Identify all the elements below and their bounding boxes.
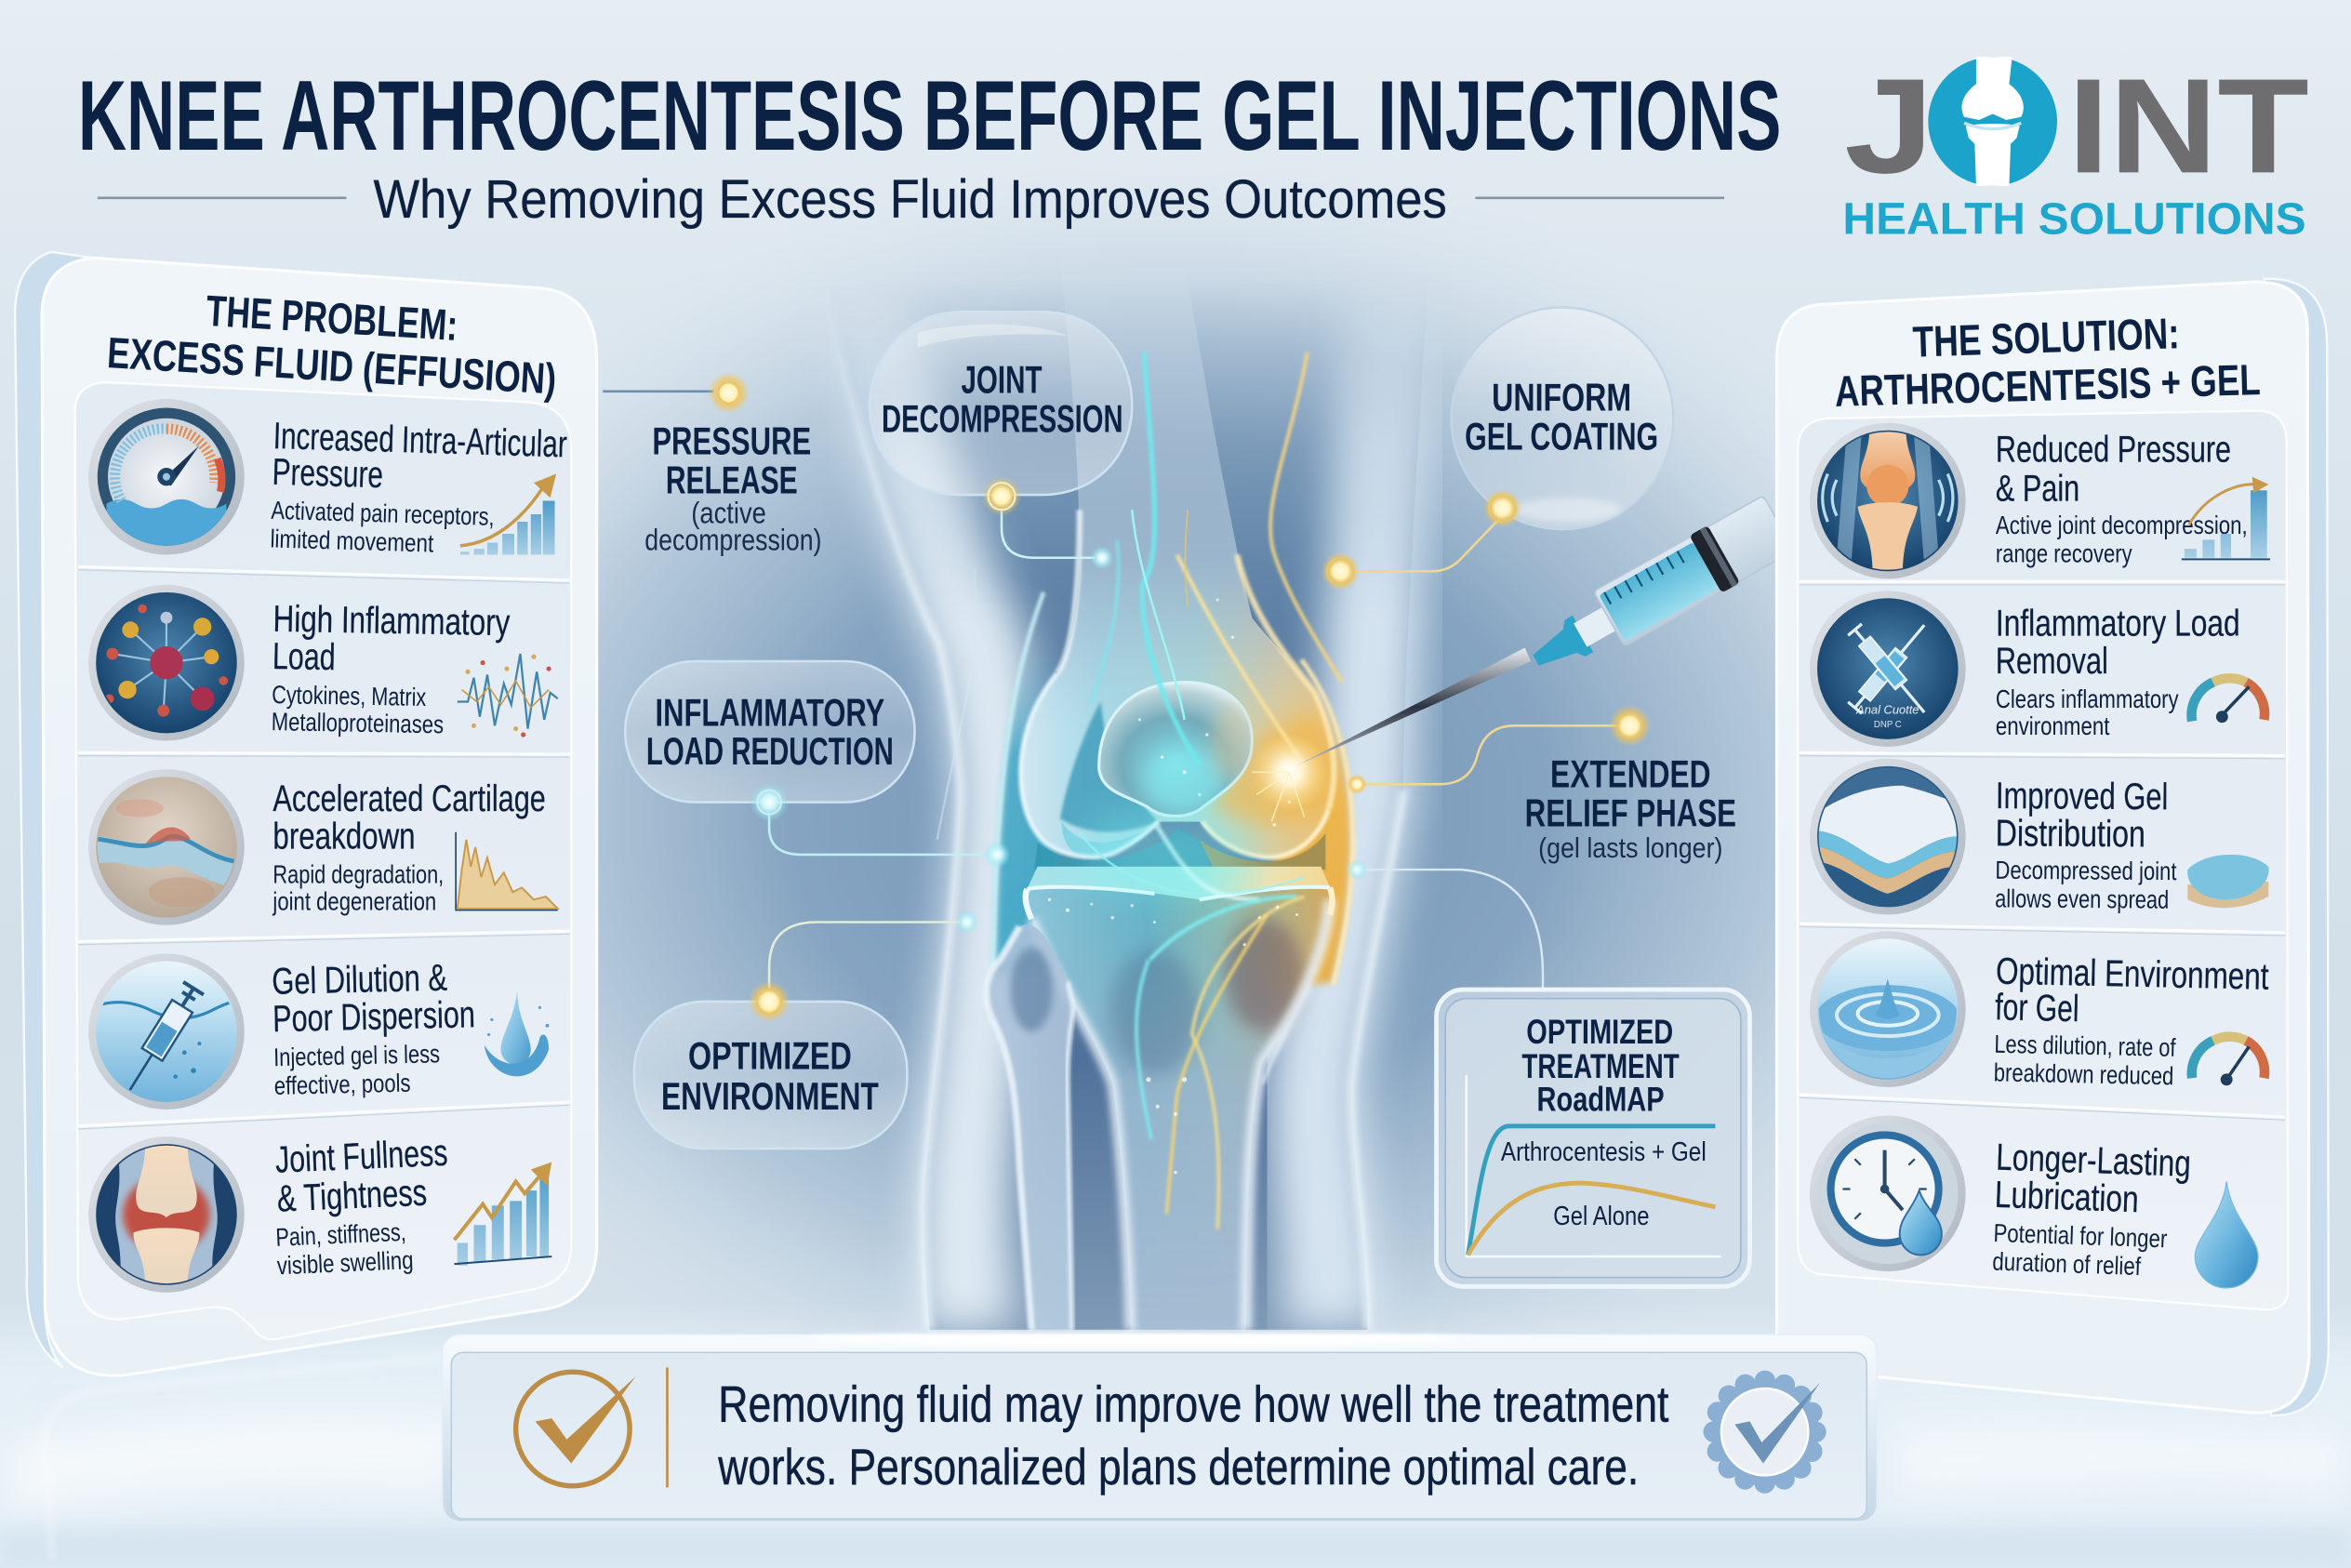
bubble: joint decompression: DECOMPRESSION [882,396,1123,440]
leg soft tissue [817,247,1430,1330]
line chart [1467,1075,1721,1256]
row text [1996,603,2240,740]
bubble: uniform gel coating [1321,308,1673,591]
row text: Longer-Lasting [1996,1136,2192,1185]
roadmap title: RoadMAP [1537,1080,1665,1119]
row text: Optimal Environment [1996,950,2269,998]
syringe [1295,494,1795,766]
row text: Increased Intra-Articular [272,415,567,465]
label: extended relief phase: (gel lasts longer) [1538,832,1722,864]
mini chart: waveform [458,654,558,737]
mini gauge [2192,678,2265,723]
panel thickness [2264,279,2329,1415]
connector: roadmap [1347,859,1543,992]
row text: Less dilution, rate of [1994,1030,2176,1062]
row text: duration of relief [1992,1247,2142,1281]
tibia [1026,867,1332,1330]
texture dots [1048,598,1298,1175]
line chart: Gel Alone [1553,1202,1649,1231]
label: extended relief phase [1525,751,1736,864]
icon: swollen joint [88,1136,245,1293]
row text [272,1132,453,1280]
row text: breakdown reduced [1994,1057,2174,1090]
knee illustration [817,233,1430,1330]
row: gel dilution [88,953,549,1110]
icon: splash drop [485,990,549,1076]
connector: inflammatory [750,783,1011,868]
row text: Pain, stiffness, [275,1217,406,1252]
left panel: the problem [15,252,597,1375]
icon: gold check [516,1372,636,1486]
row text: breakdown [272,816,416,857]
row text: Accelerated Cartilage [272,777,546,819]
panel face [1777,282,2309,1413]
roadmap card [1437,990,1749,1286]
row: gel distribution [1810,759,2269,914]
barrel [1593,494,1795,647]
bubble: joint decompression [870,312,1132,570]
row text: Pressure [272,451,384,496]
row: optimal environment [1810,931,2269,1093]
icon: pressure gauge [88,399,245,555]
row: cartilage breakdown [88,769,558,925]
row text: Reduced Pressure [1996,429,2231,471]
icon: molecule network [88,585,245,740]
icon: gel layers [1810,759,1966,914]
panel heading [106,286,558,404]
row text: allows even spread [1995,884,2169,914]
row text: Improved Gel [1996,775,2169,817]
icon: blue seal [1712,1379,1820,1484]
row text: & Pain [1996,467,2079,509]
connector: decompression [982,477,1114,570]
icon: calm knee [1810,423,1966,578]
row: reduced pressure [1810,423,2270,578]
callout text: Removing fluid may improve how well the treatment [718,1375,1668,1432]
icon: worn cartilage [88,769,245,925]
row text [1992,1136,2192,1282]
label: pressure release: decompression) [644,524,822,557]
panel heading [1834,309,2261,416]
bubble: inflammatory load reduction: INFLAMMATORY [656,690,884,734]
icon: water drop [2195,1181,2258,1288]
logo: HEALTH SOLUTIONS [1842,194,2306,245]
line chart: Arthrocentesis + Gel [1501,1137,1707,1167]
connector: pressure release [603,372,750,414]
label: pressure release: (active [691,497,766,530]
bubble: optimized environment: OPTIMIZED [688,1034,852,1078]
row text: environment [1996,711,2110,740]
right panel: the solution [1777,279,2329,1415]
fluid glows [1080,813,1259,897]
row: longer lasting [1810,1115,2258,1288]
label: pressure release [644,419,822,557]
logo: INT [2067,50,2309,201]
row text: Activated pain receptors, [271,496,495,531]
teal joint capsule [992,592,1057,982]
icon: gel pad [2187,855,2269,908]
label: pressure release: PRESSURE [652,419,811,463]
gold joint capsule [1274,659,1353,990]
row text: visible swelling [276,1245,414,1280]
roadmap title: TREATMENT [1521,1046,1680,1085]
bottom callout bar [443,1333,1878,1521]
roadmap title: OPTIMIZED [1526,1012,1673,1051]
row text [271,598,511,740]
panel heading: THE SOLUTION: [1912,309,2180,366]
row text: Poor Dispersion [272,993,475,1040]
row text: Active joint decompression, [1996,511,2248,539]
logo: J [1844,50,1934,201]
row: inflammatory removal [1810,591,2265,747]
mini chart: bars with arrow [455,1162,551,1266]
row text: Load [272,635,336,678]
row text: joint degeneration [272,887,436,916]
row text: Inflammatory Load [1996,603,2240,644]
knee joint space [1034,828,1325,870]
row text [272,777,546,916]
patella [1099,683,1254,816]
row text: effective, pools [273,1069,411,1100]
glow lines [1080,352,1342,1229]
bubble: uniform gel coating: GEL COATING [1465,415,1658,458]
connector: environment [749,910,979,1023]
connector: gel coating [1321,489,1521,591]
bar rim [443,1335,1878,1521]
row text: for Gel [1995,986,2079,1030]
row text [1996,429,2248,568]
row text: range recovery [1996,539,2132,568]
row text: Metalloproteinases [271,707,444,738]
label: extended relief phase: RELIEF PHASE [1525,791,1736,834]
icon: crossed syringes: Anal Cuotte [1855,702,1919,716]
row text: Rapid degradation, [272,860,444,889]
panel face [42,258,597,1375]
mini gauge [2192,1037,2265,1085]
row text [270,415,567,562]
icon: water ripple [1810,931,1966,1087]
injection sparkle [1251,733,1328,821]
row: inflammatory load [88,585,558,740]
needle [1295,647,1531,766]
icon: crossed syringes: DNP C [1874,720,1902,730]
row text: Lubrication [1994,1174,2139,1220]
row text: Cytokines, Matrix [272,680,427,711]
label: pressure release: RELEASE [666,458,798,501]
row text [1994,950,2269,1093]
row text: Clears inflammatory [1996,684,2179,713]
panel heading: EXCESS FLUID (EFFUSION) [106,328,558,404]
icon: crossed syringes [1810,591,1966,747]
callout text: works. Personalized plans determine optimal care. [717,1438,1639,1495]
row text: Decompressed joint [1995,856,2177,885]
row text: Joint Fullness [274,1132,448,1181]
panel heading: THE PROBLEM: [205,286,459,350]
connector: extended relief [1347,705,1651,794]
icon: syringe in water [88,953,245,1110]
row text: Distribution [1996,812,2145,855]
label: extended relief phase: EXTENDED [1550,751,1711,795]
logo knee circle [1928,57,2057,186]
bubble: uniform gel coating: UNIFORM [1492,376,1631,419]
mini chart: rising bars [460,473,556,555]
bubble: inflammatory load reduction: LOAD REDUCTION [646,729,894,773]
row: increased pressure [88,399,567,562]
logo [1842,50,2309,245]
row text [1995,775,2178,914]
fibula [987,924,1073,1330]
inner card [1798,411,2288,1309]
roadmap title [1521,1012,1680,1119]
panel thickness [15,252,93,1367]
row text: Removal [1996,640,2108,682]
row text: Potential for longer [1993,1218,2168,1253]
row text: High Inflammatory [272,598,511,644]
femur [1021,233,1334,857]
icon: clock and drop [1810,1115,1966,1271]
hub [1525,601,1619,679]
row text: Gel Dilution & [272,957,447,1003]
row: joint fullness [88,1132,551,1293]
row text [272,956,477,1100]
row text: & Tightness [276,1172,428,1220]
bubble: inflammatory load reduction [625,661,1011,868]
row text: Injected gel is less [273,1039,440,1071]
mini chart: bars with arrow [2182,477,2270,559]
bubble: joint decompression: JOINT [961,357,1043,401]
bar face [451,1352,1866,1519]
inner card [75,382,571,1339]
callout text [717,1375,1668,1495]
row text: limited movement [270,524,434,558]
subtitle: Why Removing Excess Fluid Improves Outcomes [373,169,1447,230]
mini chart: decay [456,832,558,910]
bubble: optimized environment: ENVIRONMENT [661,1074,879,1118]
bubble: optimized environment [634,910,979,1149]
